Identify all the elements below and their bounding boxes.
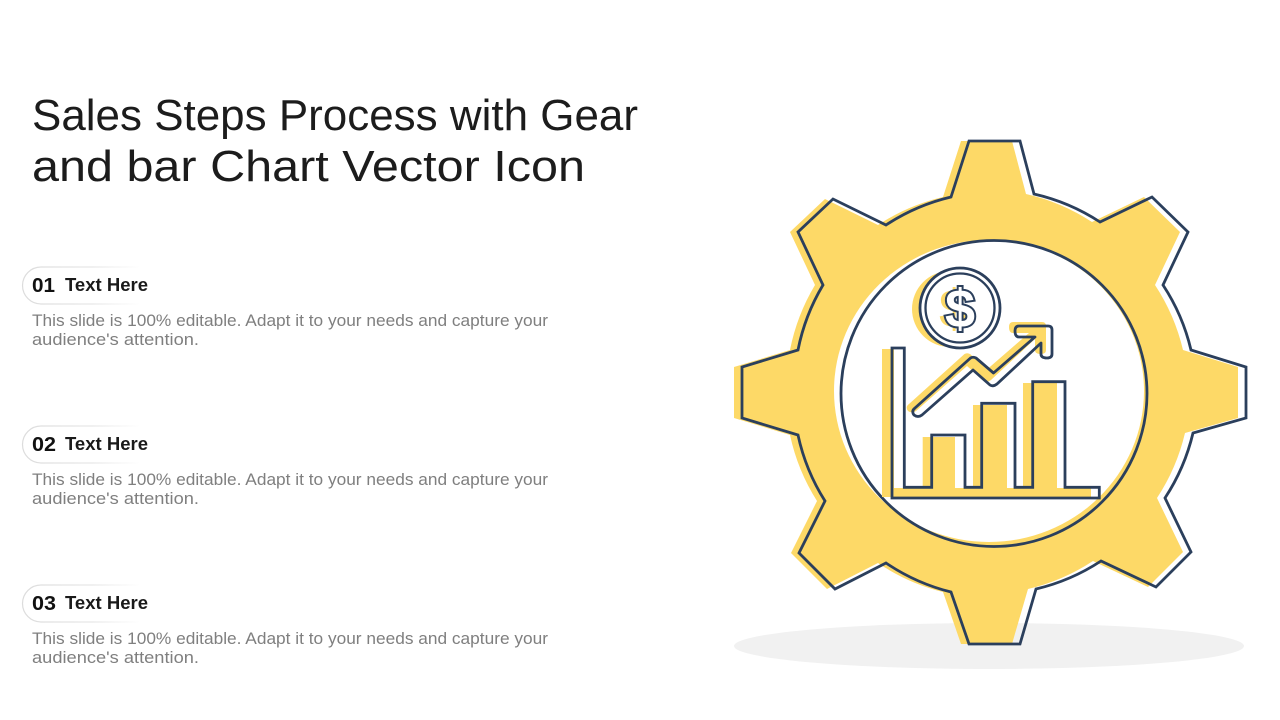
step 01 body text — [32, 312, 549, 349]
step 03 body text: audience's attention. — [32, 649, 199, 667]
step 03 number: 03 — [32, 593, 56, 615]
gear outline — [742, 141, 1246, 644]
step 01 body text: This slide is 100% editable. Adapt it to your needs and capture your — [32, 312, 549, 330]
ground shadow — [734, 623, 1244, 669]
bar chart yellow fill — [882, 349, 1091, 497]
step 01 body text: audience's attention. — [32, 331, 199, 349]
step 02 number: 02 — [32, 434, 56, 456]
step 02 heading: Text Here — [65, 434, 148, 454]
icon: gear with bar chart — [734, 141, 1246, 669]
step 02 body text: This slide is 100% editable. Adapt it to your needs and capture your — [32, 471, 549, 489]
step 02 pill outline — [23, 426, 140, 463]
title: Sales Steps Process with Gear — [32, 91, 638, 140]
step 03 — [23, 585, 549, 667]
title: and bar Chart Vector Icon — [32, 142, 585, 191]
title — [32, 91, 638, 191]
bar chart outline — [892, 348, 1099, 498]
step 02 body text: audience's attention. — [32, 490, 199, 508]
step 03 heading: Text Here — [65, 593, 148, 613]
step 01 heading: Text Here — [65, 275, 148, 295]
dollar sign: $ — [945, 279, 975, 339]
step 03 body text — [32, 630, 549, 667]
step 02 — [23, 426, 549, 508]
coin inner ring — [926, 274, 994, 342]
step 01 — [23, 267, 549, 349]
coin yellow backing — [912, 271, 988, 347]
arrow yellow fill — [907, 322, 1046, 412]
dollar sign shadow: $ — [939, 279, 969, 339]
step 02 body text — [32, 471, 549, 508]
step 03 pill outline — [23, 585, 140, 622]
step 03 body text: This slide is 100% editable. Adapt it to your needs and capture your — [32, 630, 549, 648]
step 01 number: 01 — [32, 275, 55, 297]
gear inner ring — [841, 240, 1147, 546]
arrow outline — [913, 326, 1052, 416]
gear yellow fill — [734, 141, 1238, 644]
coin white face — [920, 268, 1000, 348]
gear white centre — [834, 240, 1144, 542]
step 01 pill outline — [23, 267, 140, 304]
